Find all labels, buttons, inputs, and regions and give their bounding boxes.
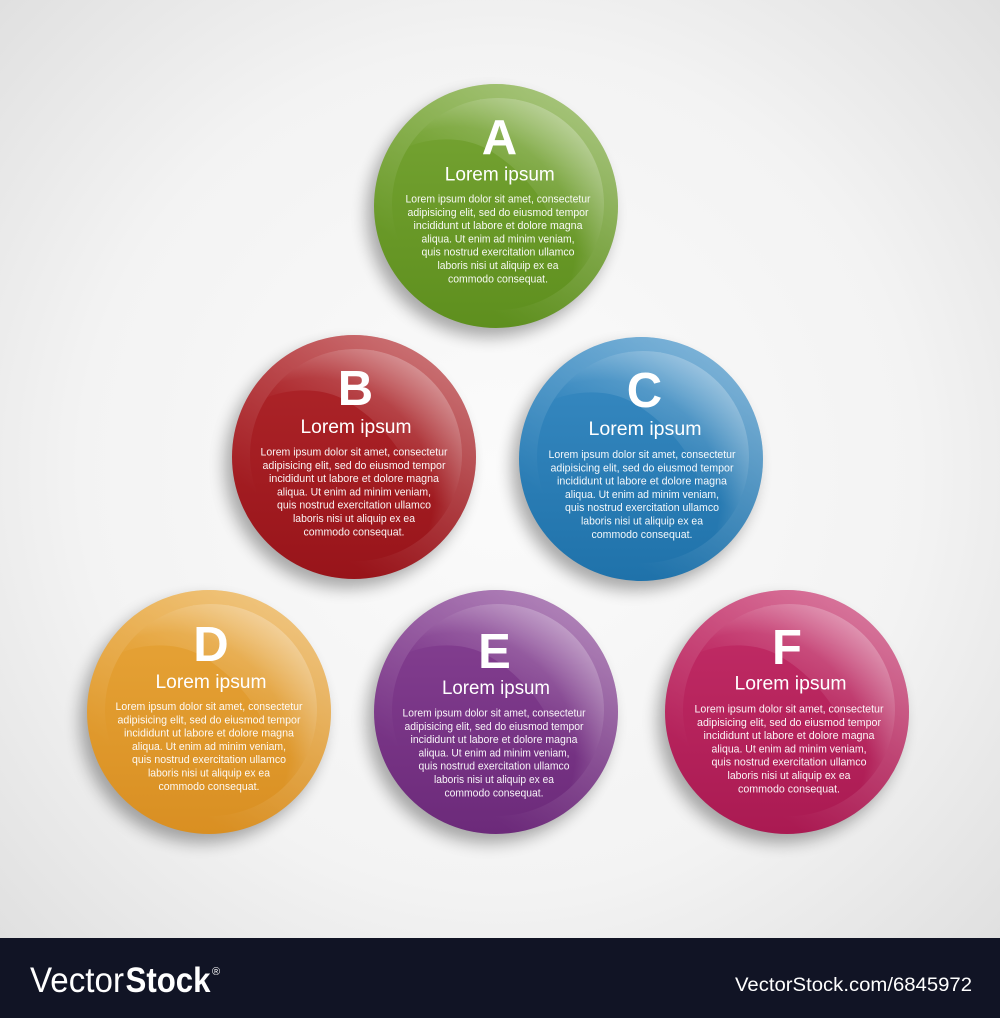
body text D: incididunt ut labore et dolore magna xyxy=(124,728,294,740)
body text C: quis nostrud exercitation ullamco xyxy=(565,502,719,514)
body text A: incididunt ut labore et dolore magna xyxy=(414,220,583,232)
body text E: laboris nisi ut aliquip ex ea xyxy=(434,774,554,786)
body text C: Lorem ipsum dolor sit amet, consectetur xyxy=(548,449,736,461)
body text A xyxy=(406,194,591,285)
body text A: quis nostrud exercitation ullamco xyxy=(422,247,575,259)
body text E: quis nostrud exercitation ullamco xyxy=(418,761,570,773)
body text F xyxy=(694,704,884,795)
body text D: commodo consequat. xyxy=(158,781,260,793)
body text E xyxy=(402,708,586,799)
body text D xyxy=(116,701,303,793)
heading D: Lorem ipsum xyxy=(156,671,266,693)
heading E: Lorem ipsum xyxy=(442,677,550,699)
body text C: commodo consequat. xyxy=(592,529,692,541)
badge F: magenta circle xyxy=(658,587,912,843)
heading C: Lorem ipsum xyxy=(588,418,702,440)
image id link text: VectorStock.com/6845972 xyxy=(735,974,972,996)
badge B: red circle xyxy=(225,332,479,588)
body text F: commodo consequat. xyxy=(738,783,840,795)
body text A: laboris nisi ut aliquip ex ea xyxy=(438,260,559,272)
body text D: aliqua. Ut enim ad minim veniam, xyxy=(132,741,286,753)
letter E: E xyxy=(478,625,511,679)
badge A: green circle xyxy=(367,81,621,337)
body text B: Lorem ipsum dolor sit amet, consectetur xyxy=(260,446,448,458)
logo: VectorStock xyxy=(30,961,220,1000)
body text B: aliqua. Ut enim ad minim veniam, xyxy=(277,486,431,498)
body text D: quis nostrud exercitation ullamco xyxy=(132,754,286,766)
body text B: adipisicing elit, sed do eiusmod tempor xyxy=(262,460,446,472)
body text B: commodo consequat. xyxy=(304,526,404,538)
body text C: incididunt ut labore et dolore magna xyxy=(557,476,727,488)
letter D: D xyxy=(193,618,229,672)
body text D: Lorem ipsum dolor sit amet, consectetur xyxy=(116,701,303,713)
body text E: commodo consequat. xyxy=(444,787,544,799)
letter C: C xyxy=(627,364,662,418)
footer bar xyxy=(0,938,1000,1018)
body text A: Lorem ipsum dolor sit amet, consectetur xyxy=(406,194,591,206)
body text F: Lorem ipsum dolor sit amet, consectetur xyxy=(694,704,884,716)
badge C: blue circle xyxy=(512,334,766,590)
body text E: aliqua. Ut enim ad minim veniam, xyxy=(418,747,570,759)
body text A: adipisicing elit, sed do eiusmod tempor xyxy=(408,207,589,219)
badge D: orange circle xyxy=(80,587,334,843)
body text A: aliqua. Ut enim ad minim veniam, xyxy=(422,233,574,245)
letter B: B xyxy=(338,362,373,416)
heading B: Lorem ipsum xyxy=(300,416,412,438)
letter A: A xyxy=(482,111,517,165)
body text B: quis nostrud exercitation ullamco xyxy=(277,500,431,512)
body text D: adipisicing elit, sed do eiusmod tempor xyxy=(118,714,301,726)
body text B: incididunt ut labore et dolore magna xyxy=(269,473,439,485)
body text A: commodo consequat. xyxy=(448,273,548,285)
badge E: purple circle xyxy=(367,587,621,843)
body text C: laboris nisi ut aliquip ex ea xyxy=(581,516,703,528)
body text F: adipisicing elit, sed do eiusmod tempor xyxy=(697,717,881,729)
body text F: quis nostrud exercitation ullamco xyxy=(712,757,867,769)
logo: VectorStock: Vector xyxy=(30,961,124,1000)
body text D: laboris nisi ut aliquip ex ea xyxy=(148,768,270,780)
body text C xyxy=(548,449,736,541)
body text B xyxy=(260,446,448,538)
logo: VectorStock: ® xyxy=(212,966,220,978)
body text B: laboris nisi ut aliquip ex ea xyxy=(293,513,415,525)
letter F: F xyxy=(772,621,802,675)
heading A: Lorem ipsum xyxy=(445,164,555,186)
body text E: Lorem ipsum dolor sit amet, consectetur xyxy=(402,708,586,720)
heading F: Lorem ipsum xyxy=(734,672,846,694)
body text F: laboris nisi ut aliquip ex ea xyxy=(728,770,851,782)
body text C: adipisicing elit, sed do eiusmod tempor xyxy=(550,462,734,474)
body text F: aliqua. Ut enim ad minim veniam, xyxy=(712,743,866,755)
logo: VectorStock: Stock xyxy=(126,961,211,1000)
body text E: incididunt ut labore et dolore magna xyxy=(410,734,578,746)
body text C: aliqua. Ut enim ad minim veniam, xyxy=(565,489,719,501)
body text F: incididunt ut labore et dolore magna xyxy=(704,730,875,742)
body text E: adipisicing elit, sed do eiusmod tempor xyxy=(404,721,584,733)
